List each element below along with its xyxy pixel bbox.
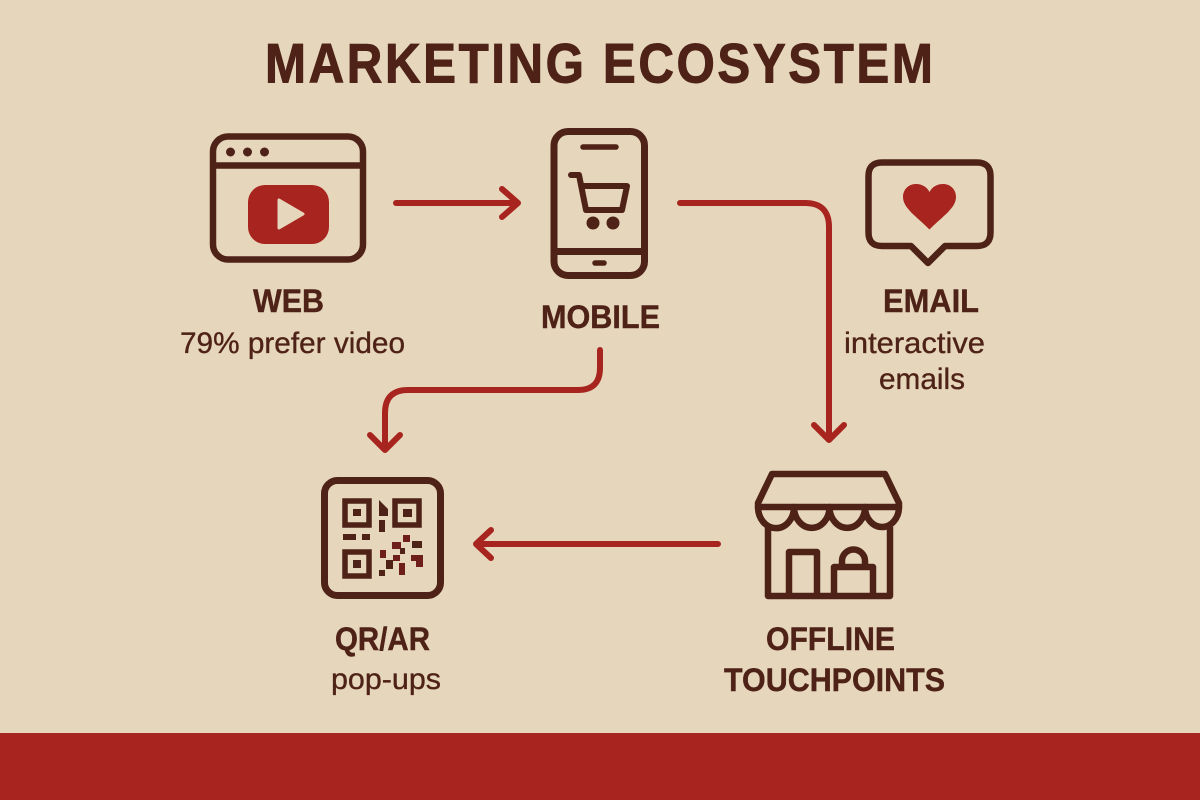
title: MARKETING ECOSYSTEM <box>265 33 933 95</box>
text: email description: interactive <box>844 327 985 360</box>
label: mobile: MOBILE <box>541 299 660 335</box>
footer band <box>0 733 1200 800</box>
arrow: web to mobile <box>396 189 518 217</box>
text: web stat: 79% prefer video <box>180 327 405 360</box>
icon: storefront <box>758 474 899 596</box>
icon: QR code <box>324 480 440 596</box>
label: web: WEB <box>253 283 324 319</box>
icon: mobile phone with cart <box>554 132 644 276</box>
icon: email speech bubble with heart <box>868 162 990 263</box>
label: offline touchpoints: OFFLINE <box>766 621 895 657</box>
label: offline touchpoints: TOUCHPOINTS <box>724 662 945 698</box>
text: QR description: pop-ups <box>331 663 441 696</box>
arrow: offline to QR <box>476 530 718 558</box>
arrow: mobile to QR <box>370 350 600 450</box>
arrow: mobile to offline <box>680 203 844 440</box>
text: email description: emails <box>879 363 965 396</box>
label: email: EMAIL <box>883 283 979 319</box>
icon: web browser with video <box>213 136 363 260</box>
label: QR/AR: QR/AR <box>335 621 430 657</box>
